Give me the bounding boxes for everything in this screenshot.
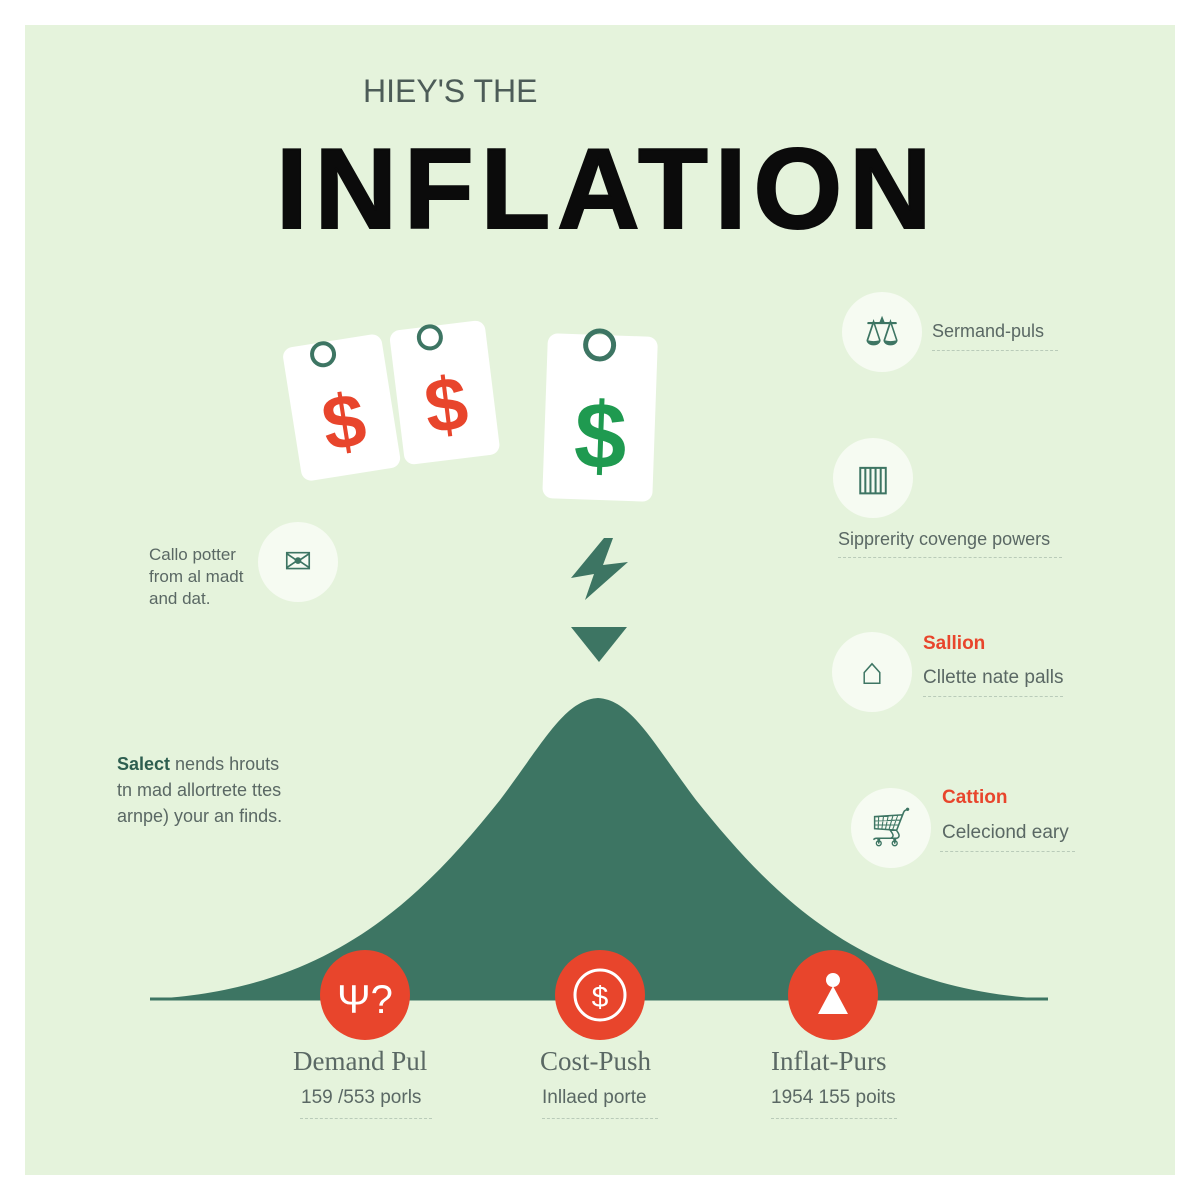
left callout 1 bbox=[149, 545, 244, 608]
icon: lightning bbox=[571, 538, 628, 600]
text: 159 /553 porls bbox=[301, 1087, 421, 1108]
icons: bottom circles bbox=[320, 950, 878, 1040]
right item 2: ▥ bbox=[856, 457, 890, 498]
tag: green bbox=[542, 329, 658, 502]
tag: red 1: $ bbox=[316, 377, 371, 468]
bottom label 1: Demand Pul bbox=[293, 1046, 427, 1076]
arrow down bbox=[571, 627, 627, 662]
text: Cattion bbox=[942, 787, 1007, 808]
text: Sallion bbox=[923, 633, 985, 654]
left callout 1: and dat. bbox=[149, 589, 210, 608]
text: Inllaed porte bbox=[542, 1087, 647, 1108]
left callout 1: from al madt bbox=[149, 567, 243, 586]
tag: red 2 bbox=[389, 320, 501, 465]
left callout 2: Salect nends hrouts bbox=[117, 754, 279, 774]
left callout 2: tn mad allortrete ttes bbox=[117, 780, 281, 800]
text: 1954 155 poits bbox=[771, 1087, 896, 1108]
right item 1: ⚖ bbox=[864, 310, 900, 354]
right item 4: 🛒︎ bbox=[867, 807, 915, 849]
left callout 2: arnpe) your an finds. bbox=[117, 806, 282, 826]
title: INFLATION bbox=[276, 126, 938, 253]
left callout 1: Callo potter bbox=[149, 545, 236, 564]
tag: red 2: $ bbox=[420, 361, 472, 450]
text: Cllette nate palls bbox=[923, 667, 1063, 688]
tag: red 1 bbox=[282, 333, 402, 482]
right item 3 bbox=[832, 632, 912, 712]
bottom label 3: Inflat-Purs bbox=[771, 1046, 886, 1076]
subtitle: HIEY'S THE bbox=[363, 73, 537, 109]
text: Sipprerity covenge powers bbox=[838, 529, 1050, 549]
right item 4 bbox=[851, 788, 931, 868]
bottom label 2: Cost-Push bbox=[540, 1046, 651, 1076]
icon: money bbox=[258, 522, 338, 602]
icons: bottom circles: Ψ? bbox=[337, 978, 393, 1022]
bell curve bbox=[150, 698, 1048, 999]
right item 2 bbox=[833, 438, 913, 518]
left callout 2 bbox=[117, 754, 282, 826]
icons: bottom circles: $ bbox=[592, 981, 609, 1014]
icon: money: ✉ bbox=[284, 543, 312, 581]
right item 1 bbox=[842, 292, 922, 372]
text: Celeciond eary bbox=[942, 822, 1069, 843]
right item 3: ⌂ bbox=[861, 651, 883, 693]
text: Sermand-puls bbox=[932, 321, 1044, 341]
tag: green: $ bbox=[573, 382, 628, 489]
